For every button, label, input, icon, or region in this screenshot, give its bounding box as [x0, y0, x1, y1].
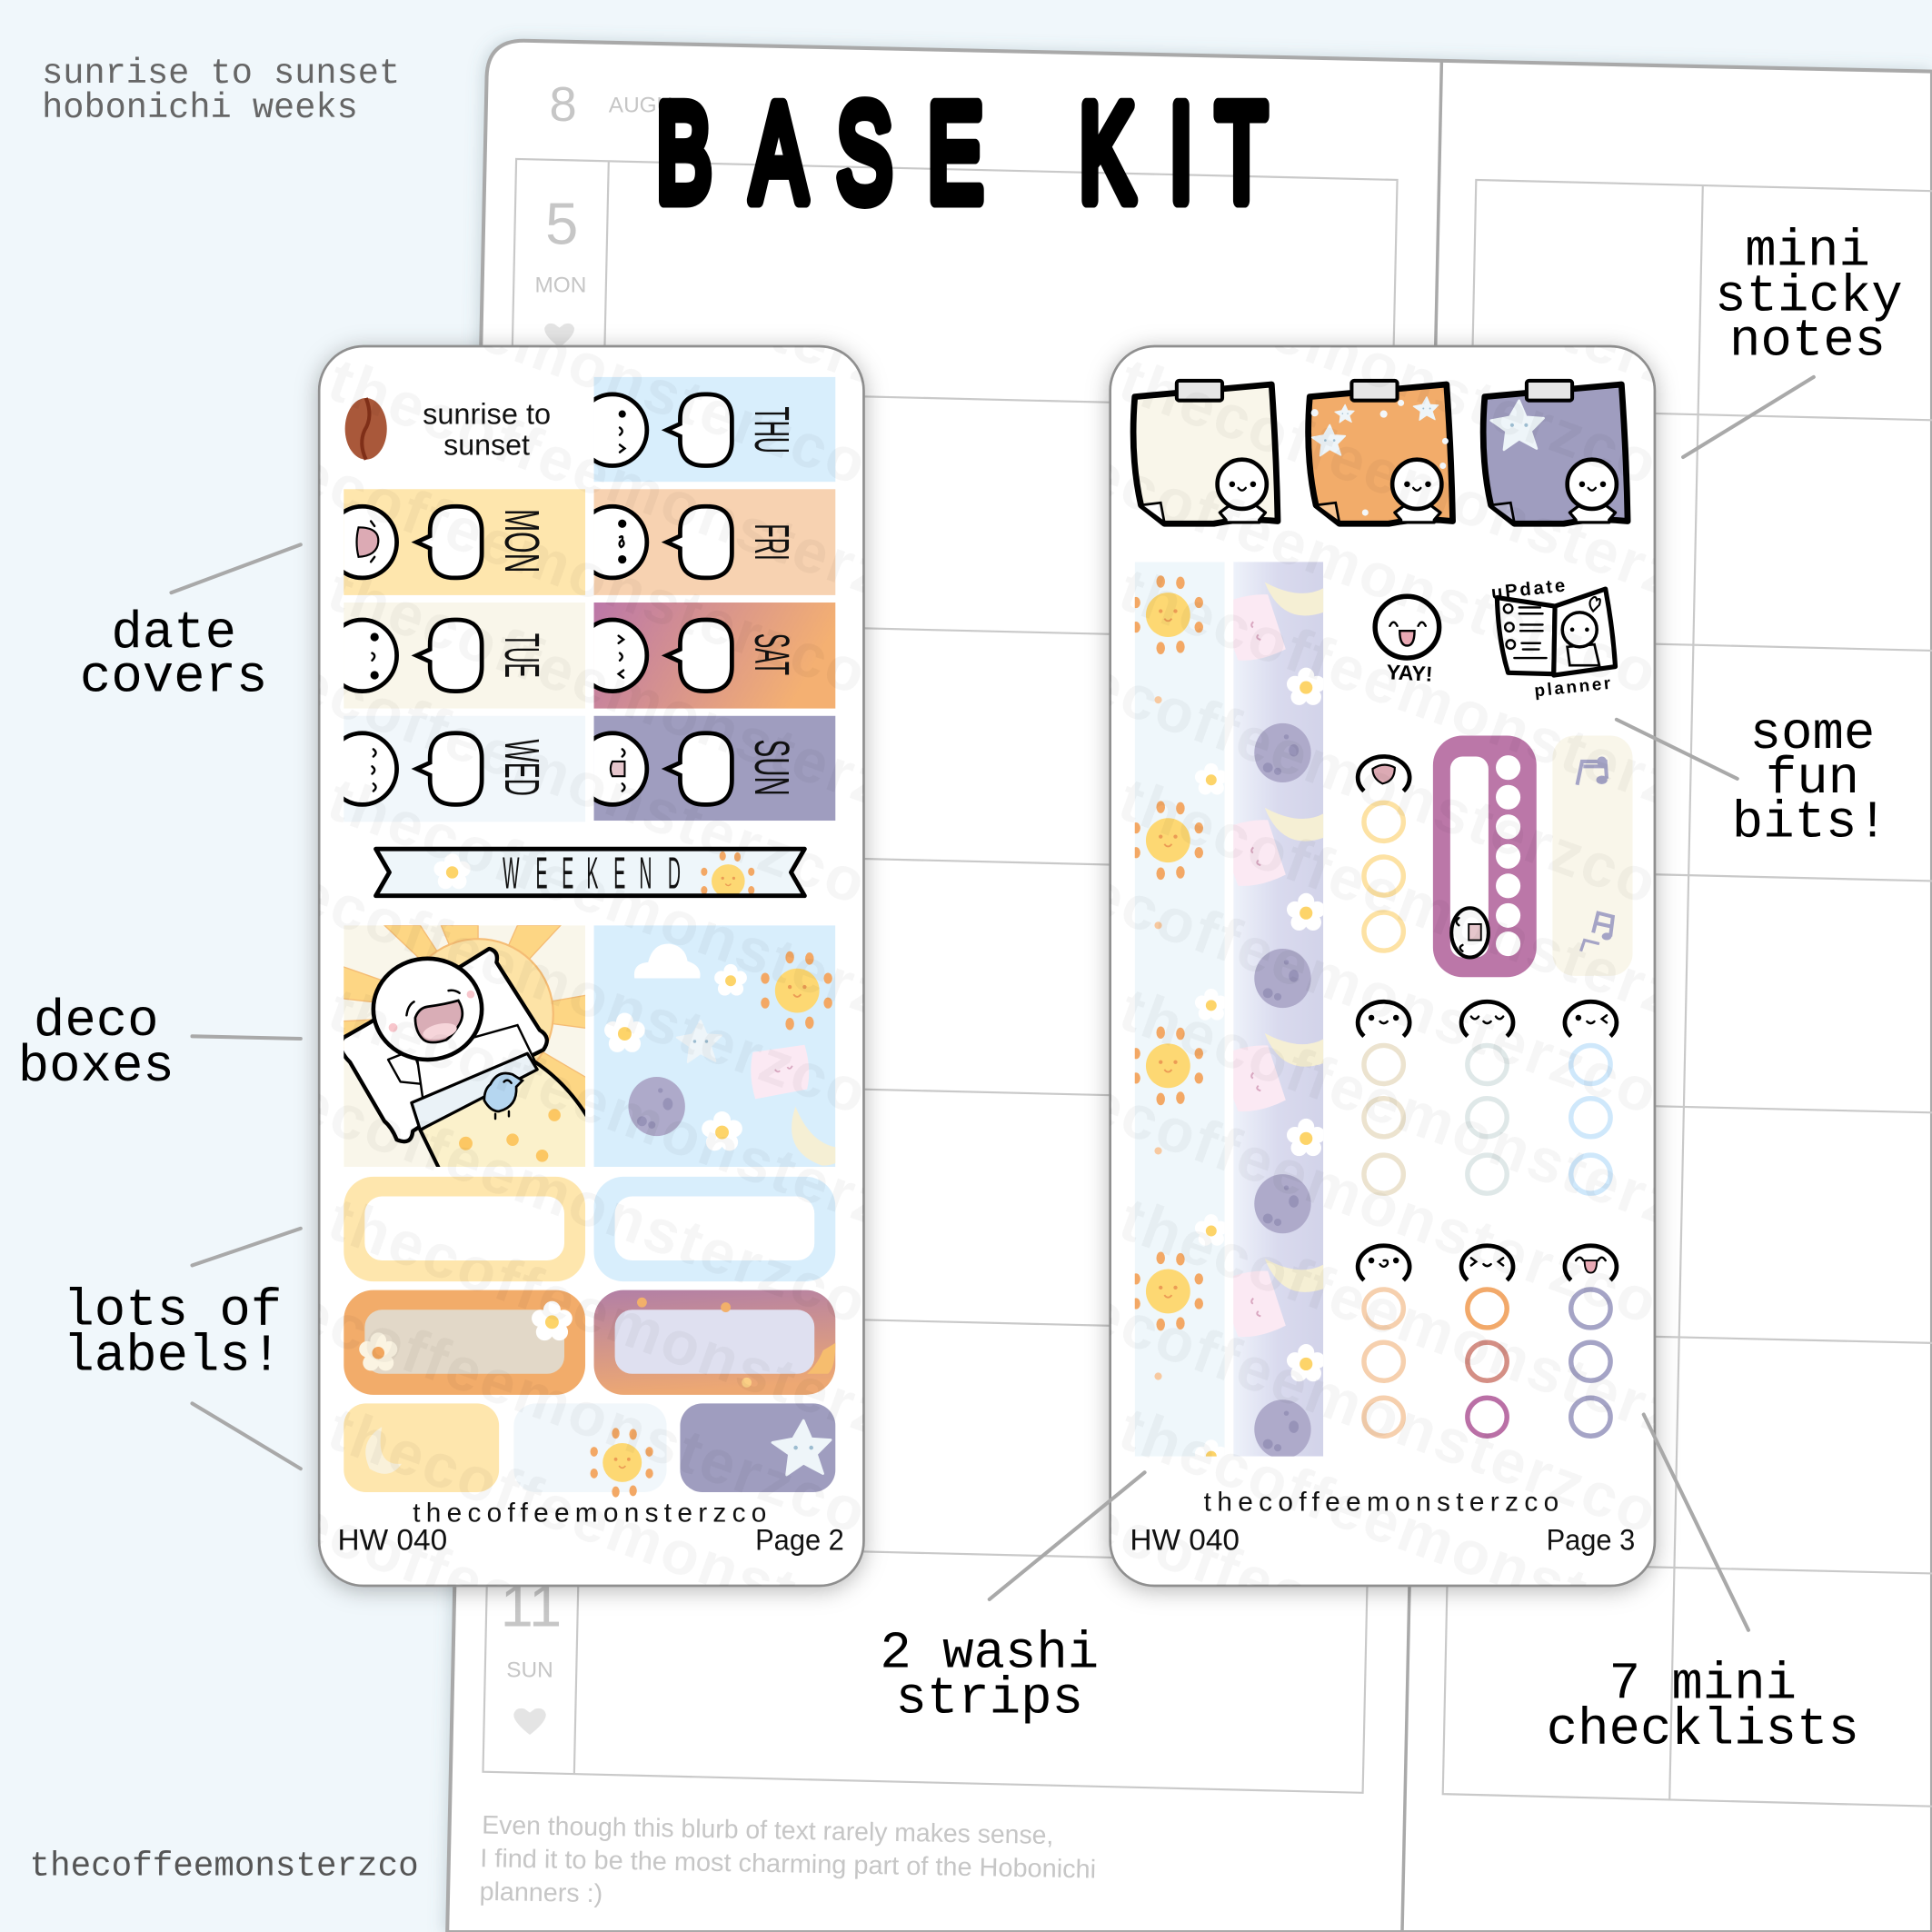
- checklist: cream: [1358, 1001, 1409, 1193]
- watermark: left sheet: thecoffeemonsterzco: [227, 626, 876, 919]
- watermark: right sheet: thecoffeemonsterzco: [1110, 1395, 1760, 1687]
- callout: fun bits: fun: [1766, 750, 1859, 809]
- watermark: right sheet: thecoffeemonsterzco: [1019, 207, 1668, 499]
- sticker: date cover SAT: SAT: [744, 633, 799, 675]
- callout: mini checklists: checklists: [1547, 1701, 1859, 1760]
- sticker: cream music note strip: [1552, 735, 1633, 976]
- arrow: fun bits: [1617, 720, 1738, 779]
- watermark: right sheet: thecoffeemonsterzco: [1018, 1466, 1668, 1758]
- callout: fun bits: bits!: [1732, 794, 1888, 853]
- text: product name: sunrise to sunset: [42, 54, 400, 94]
- sticker: update planner book: planner: [1533, 674, 1612, 701]
- sticker: date cover WED: WED: [494, 740, 549, 796]
- checklist: sunset: [1461, 1246, 1513, 1436]
- sticker: date cover WED: [328, 716, 585, 822]
- title: BASE KIT: [656, 75, 1267, 230]
- callout: lots of labels: lots of: [63, 1282, 282, 1341]
- watermark: right sheet: thecoffeemonsterzco: [1019, 417, 1668, 709]
- checklist: grey blue: [1461, 1001, 1513, 1193]
- callout: deco boxes: deco: [34, 992, 159, 1051]
- checklist: yellow: [1358, 756, 1409, 951]
- watermark: right sheet: thecoffeemonsterzco: [1111, 975, 1761, 1267]
- callout: deco boxes: boxes: [18, 1038, 174, 1097]
- text: product name: hobonichi weeks: [42, 88, 358, 128]
- sticker: date cover MON: MON: [494, 509, 549, 573]
- sticky note: purple star: [1483, 381, 1628, 523]
- callout: sticky notes: mini: [1745, 223, 1870, 282]
- arrow: date covers: [171, 544, 301, 593]
- callout: washi strips: strips: [896, 1670, 1083, 1729]
- callout: sticky notes: sticky: [1715, 268, 1903, 327]
- arrow: sticky notes: [1683, 377, 1814, 457]
- watermark: left sheet: thecoffeemonsterzco: [228, 837, 877, 1129]
- watermark: left sheet: thecoffeemonsterzco: [227, 1046, 877, 1339]
- planner spread: SUN: [506, 1658, 553, 1682]
- watermark: right sheet: thecoffeemonsterzco: [1019, 1046, 1668, 1339]
- washi strip: sunrise: [1131, 562, 1228, 1471]
- callout: date covers: covers: [80, 649, 267, 708]
- text: brand: thecoffeemonsterzco: [30, 1848, 419, 1887]
- text: sheet code: HW 040: [1130, 1524, 1240, 1557]
- planner spread: 8: [550, 77, 577, 132]
- checklist: lavender: [1565, 1246, 1617, 1436]
- text: planner blurb: [479, 1811, 1097, 1917]
- label: small purple with star: [680, 1403, 835, 1492]
- watermark: left sheet: thecoffeemonsterzco: [320, 765, 969, 1057]
- sticker: sky pattern deco box: [594, 925, 849, 1167]
- sticker: yay face: YAY!: [1386, 660, 1433, 686]
- sticker: date cover THU: THU: [744, 406, 799, 453]
- banner: weekend: WEEKEND: [503, 848, 681, 898]
- icon: coffee bean: [345, 398, 387, 460]
- watermark: right sheet: thecoffeemonsterzco: [1111, 345, 1760, 638]
- arrow: labels upper: [193, 1229, 301, 1265]
- sticker: date cover SUN: SUN: [744, 740, 799, 796]
- sticky note: cream: [1133, 381, 1278, 523]
- text: planner blurb: I find it to be the most charming part of the Hobonichi: [480, 1844, 1096, 1885]
- text: page number: Page 3: [1547, 1524, 1635, 1557]
- sticker: date cover FRI: FRI: [744, 523, 799, 561]
- panel: sticker sheet page 2: [319, 346, 863, 1586]
- text: sheet name: sunrise to: [423, 397, 551, 430]
- watermark: left sheet: thecoffeemonsterzco: [320, 1395, 970, 1687]
- watermark: left sheet: thecoffeemonsterzco: [227, 1256, 877, 1548]
- callout: mini checklists: 7 mini: [1609, 1655, 1797, 1714]
- watermark: right sheet: [614, 115, 1932, 1779]
- planner spread: MON: [534, 273, 586, 297]
- callout: fun bits: some: [1750, 705, 1875, 764]
- sticker: update planner book: [1490, 576, 1616, 701]
- checklist: peach: [1358, 1246, 1409, 1436]
- text: planner blurb: Even though this blurb of text rarely makes sense,: [482, 1811, 1054, 1850]
- planner spread: AUGU: [609, 93, 672, 117]
- text: page number: Page 2: [755, 1524, 844, 1557]
- checklist: sky blue: [1565, 1001, 1617, 1193]
- sticker: yay face: [1375, 596, 1439, 686]
- sticky note: orange stars: [1309, 381, 1453, 523]
- callout: lots of labels: labels!: [63, 1328, 282, 1387]
- watermark: right sheet: thecoffeemonsterzco: [1110, 555, 1760, 847]
- watermark: left sheet: thecoffeemonsterzco: [227, 207, 877, 499]
- watermark: left sheet: thecoffeemonsterzco: [320, 136, 970, 428]
- callout: washi strips: 2 washi: [880, 1624, 1099, 1683]
- watermark: right sheet: thecoffeemonsterzco: [1018, 626, 1668, 919]
- sticker: update planner book: uPdate: [1490, 576, 1566, 603]
- arrow: deco boxes: [193, 1036, 301, 1039]
- sticker: date cover MON: [328, 489, 585, 595]
- label: purple sunset: [594, 1290, 835, 1395]
- text: planner blurb: planners :): [479, 1877, 603, 1908]
- sticker: date cover THU: [578, 377, 835, 482]
- label: blue: [594, 1177, 835, 1281]
- text: sheet brand: thecoffeemonsterzco: [413, 1498, 766, 1528]
- label: yellow: [344, 1177, 585, 1281]
- watermark: right sheet: thecoffeemonsterzco: [1110, 765, 1760, 1057]
- sticker: date cover FRI: [578, 489, 835, 595]
- planner spread: 11: [501, 1573, 562, 1639]
- panel: sticker sheet page 3: [1110, 346, 1655, 1586]
- text: sheet name: [423, 397, 551, 461]
- planner spread: 5: [545, 190, 578, 256]
- planner spread: [447, 41, 1932, 1932]
- watermark: left sheet: thecoffeemonsterzco: [227, 417, 877, 709]
- sticker: purple habit tracker: [1433, 735, 1537, 977]
- watermark: left sheet: thecoffeemonsterzco: [321, 975, 970, 1267]
- sticker: sleeping character deco box: [344, 925, 585, 1167]
- watermark: left sheet: thecoffeemonsterzco: [320, 345, 970, 638]
- sticker: date cover SAT: [578, 603, 835, 709]
- watermark: right sheet: thecoffeemonsterzco: [1111, 1185, 1760, 1477]
- arrow: mini checklists: [1644, 1415, 1748, 1630]
- watermark: left sheet: thecoffeemonsterzco: [320, 1185, 970, 1477]
- watermark: left sheet: thecoffeemonsterzco: [227, 1466, 877, 1758]
- label: orange flowers: [344, 1290, 585, 1395]
- washi strip: moon: [1217, 546, 1347, 1459]
- watermark: right sheet: thecoffeemonsterzco: [1019, 837, 1668, 1129]
- label: small yellow with moon: [344, 1403, 499, 1492]
- arrow: labels lower: [193, 1403, 301, 1469]
- watermark: left sheet: [0, 115, 1374, 1779]
- label: small pale blue with sun: [513, 1403, 667, 1498]
- watermark: left sheet: thecoffeemonsterzco: [320, 555, 970, 847]
- callout: sticky notes: notes: [1729, 312, 1886, 371]
- banner: weekend: [373, 847, 807, 898]
- sticker: date cover TUE: TUE: [494, 633, 549, 678]
- watermark: right sheet: thecoffeemonsterzco: [1019, 1256, 1668, 1548]
- text: sheet brand: thecoffeemonsterzco: [1204, 1487, 1559, 1517]
- watermark: right sheet: thecoffeemonsterzco: [1111, 136, 1761, 428]
- sticker: date cover SUN: [578, 716, 835, 821]
- text: sheet code: HW 040: [338, 1524, 447, 1557]
- callout: date covers: date: [111, 604, 236, 663]
- arrow: washi strips: [990, 1472, 1145, 1599]
- sticker: date cover TUE: [328, 603, 585, 709]
- text: sheet name: sunset: [443, 428, 530, 461]
